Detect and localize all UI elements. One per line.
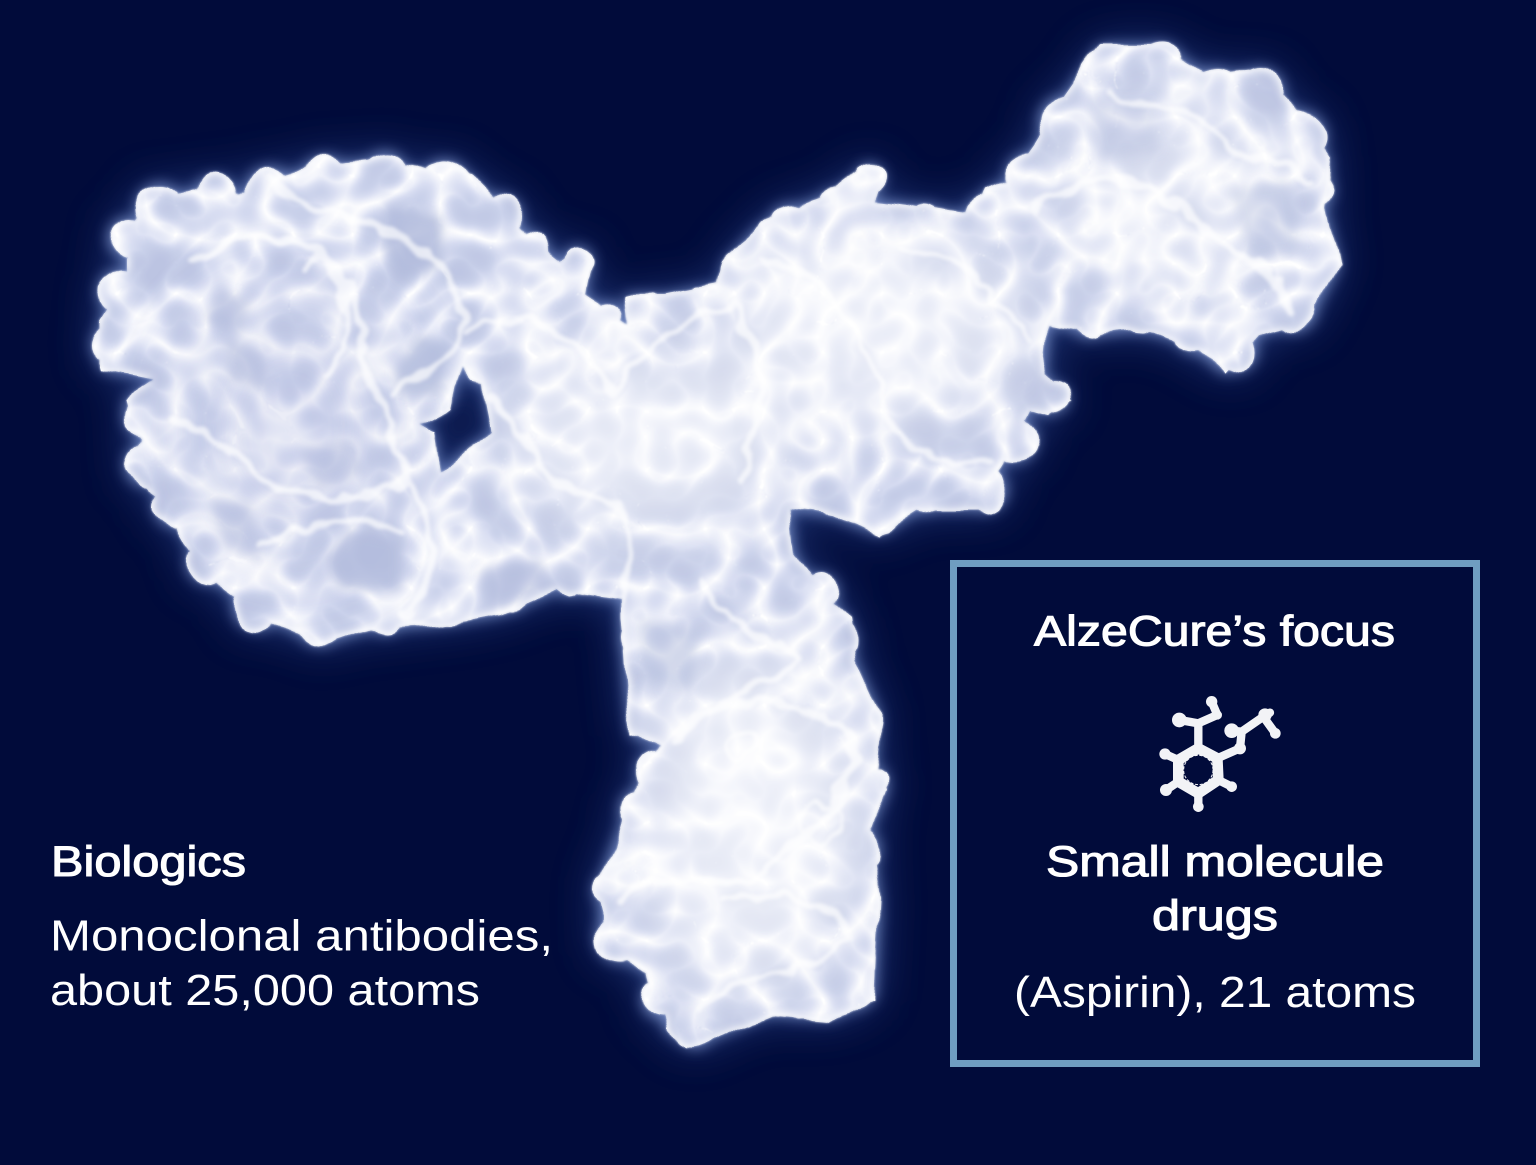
fold ridges [170,90,1310,1010]
label: biologics: about 25,000 atoms [50,966,480,1015]
text: aspirin atoms: (Aspirin), 21 atoms [1014,968,1416,1017]
label: biologics [50,838,553,1015]
icon: aspirin molecule [1159,696,1281,812]
label: biologics: Monoclonal antibodies, [50,912,553,960]
heading: small molecule drugs: drugs [1152,892,1278,940]
panel: AlzeCure's focus [954,564,1476,1064]
label: biologics: Biologics [51,838,246,886]
shaded pockets [205,100,1300,690]
heading: small molecule drugs [1046,838,1384,940]
bright zones [180,100,1280,990]
antibody molecule illustration [70,20,1370,1080]
heading: small molecule drugs: Small molecule [1046,838,1384,886]
heading: AlzeCure's focus: AlzeCure’s focus [1034,608,1395,656]
